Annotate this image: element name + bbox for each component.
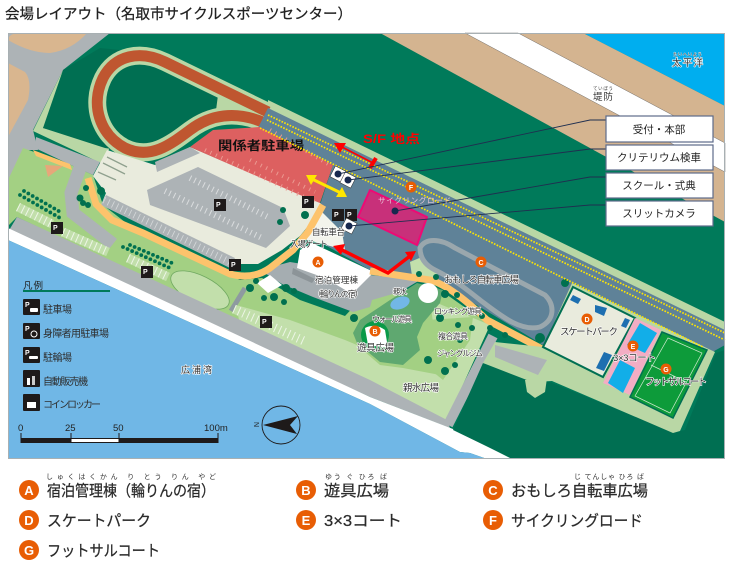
legend C: C <box>488 483 498 498</box>
map labels: 親水広場 <box>403 382 439 394</box>
map frame <box>8 34 724 458</box>
parking stalls in green <box>18 207 304 341</box>
map key <box>23 280 110 411</box>
legend A: しゅくはくかん り とう りん やど <box>46 473 216 481</box>
map orange markers: D <box>584 317 590 324</box>
legend E: E <box>302 513 311 528</box>
key items <box>23 299 109 411</box>
orange patch <box>33 150 72 170</box>
north compass: N <box>252 422 259 427</box>
legend E: 3×3コート <box>324 513 402 530</box>
branch road <box>71 168 113 244</box>
parking icons: P <box>334 212 339 219</box>
map labels: スケートパーク <box>560 327 618 338</box>
orange path <box>88 178 603 381</box>
legend B: 遊具広場 <box>324 482 389 500</box>
oval lawn <box>165 263 235 317</box>
map labels: 親水 <box>393 286 408 296</box>
map labels: ていぼう <box>593 85 613 92</box>
legend D <box>19 510 151 530</box>
callout boxes <box>606 116 713 226</box>
stripes crossing <box>98 157 127 180</box>
legend D: スケートパーク <box>47 512 151 530</box>
map labels: 宿泊管理棟 <box>315 275 358 285</box>
3x3 court <box>603 318 661 395</box>
light lawn <box>236 300 490 424</box>
lower right dark woods <box>453 350 725 459</box>
trees <box>76 185 569 375</box>
legend C <box>483 472 648 500</box>
small lot bottom <box>495 345 547 375</box>
parking icons: P <box>304 199 309 206</box>
key items: P <box>25 326 30 333</box>
tree rows <box>20 191 172 268</box>
map labels: たいへいよう <box>673 52 702 58</box>
key items: P <box>25 350 30 357</box>
north compass <box>252 406 300 444</box>
map labels: 3×3コート <box>613 353 656 364</box>
scale bar: 100m <box>204 423 228 434</box>
dark park base <box>8 148 490 424</box>
cream forecourt <box>93 147 325 264</box>
parking icons <box>51 196 357 328</box>
tan ground <box>8 33 87 137</box>
legend A: 宿泊管理棟（輪りんの宿） <box>47 482 215 500</box>
map orange markers: E <box>631 344 636 351</box>
map labels: 太平洋 <box>672 57 703 69</box>
futsal court <box>630 332 707 418</box>
legend B: B <box>301 483 311 498</box>
coast road <box>8 217 450 428</box>
legend G <box>19 540 160 560</box>
legend C: じ てんしゃ ひろ ば <box>574 472 644 481</box>
parking icons: P <box>347 212 352 219</box>
legend F: サイクリングロード <box>511 512 643 530</box>
map <box>8 33 725 459</box>
staff parking <box>190 127 333 203</box>
key items: コインロッカー <box>43 399 101 411</box>
grey road east of park <box>448 336 493 425</box>
leader dots <box>334 170 398 230</box>
scale bar: 50 <box>113 423 124 434</box>
map labels: おもしろ自転車広場 <box>444 274 519 286</box>
callout boxes: クリテリウム検車 <box>617 151 701 164</box>
upper left roads <box>8 33 110 182</box>
key items: 駐輪場 <box>43 351 72 364</box>
leader lines <box>338 120 606 226</box>
key items: 身障者用駐車場 <box>43 327 109 340</box>
map labels: 自転車台 <box>312 227 345 237</box>
parking icons: P <box>262 319 267 326</box>
beach <box>8 228 512 459</box>
white markers <box>330 166 357 234</box>
scale bar: 25 <box>65 423 76 434</box>
legend A: A <box>24 483 34 498</box>
loop track <box>97 56 268 152</box>
pink scoring area <box>358 190 427 245</box>
main parking lot <box>147 167 290 248</box>
light green verge left <box>33 70 110 165</box>
legend E <box>296 510 402 530</box>
red arrows <box>333 143 416 273</box>
legend G: G <box>24 543 34 558</box>
pond <box>389 294 411 312</box>
key items: P <box>25 302 30 309</box>
white annex <box>257 275 282 293</box>
map labels: 堤防 <box>593 91 613 103</box>
map labels: ジャングルジム <box>437 348 483 358</box>
map labels: 複合遊具 <box>438 331 468 341</box>
embankment <box>380 33 725 222</box>
light patch <box>525 378 547 398</box>
sports area surround <box>483 283 715 433</box>
verge along cycling road <box>268 100 725 332</box>
legend F <box>483 510 643 530</box>
cycling road and plaza <box>258 108 725 355</box>
lower parking strip <box>101 195 235 268</box>
legend C: おもしろ自転車広場 <box>511 482 648 500</box>
ramps <box>570 295 630 371</box>
parking icons: P <box>216 202 221 209</box>
accommodation building <box>297 243 374 294</box>
map labels: （輪りんの宿） <box>313 289 363 299</box>
S/F label: S/F 地点 <box>363 131 420 146</box>
cycling road yellow dotted lines <box>260 115 725 347</box>
map labels: フットサルコート <box>645 377 707 388</box>
scale bar <box>18 423 228 443</box>
play ring <box>361 321 389 349</box>
legend B: ゆう ぐ ひろ ば <box>325 472 387 481</box>
grey access road around lodge <box>260 262 420 312</box>
bicycle stand block <box>300 212 345 250</box>
legend B <box>296 472 389 500</box>
map labels: ウォール遊具 <box>372 314 412 324</box>
map labels: 遊具広場 <box>357 342 394 354</box>
key heading: 凡例 <box>23 280 43 292</box>
omoshiro plaza track <box>420 240 552 328</box>
bottom legend <box>19 472 648 560</box>
green patch near track <box>410 256 440 280</box>
map labels <box>181 52 707 394</box>
Pacific Ocean <box>583 33 725 106</box>
parking icons: P <box>143 269 148 276</box>
parking icons: P <box>53 225 58 232</box>
tan triangle <box>45 165 63 177</box>
map orange markers: F <box>409 185 414 192</box>
title: 会場レイアウト（名取市サイクルスポーツセンター） <box>5 6 352 23</box>
tree belt <box>43 48 130 152</box>
legend D: D <box>24 513 34 528</box>
fountain park <box>353 283 473 380</box>
small grey parking <box>155 147 200 172</box>
legend A <box>19 473 216 500</box>
callout boxes: 受付・本部 <box>633 123 686 136</box>
yellow double arrow <box>306 175 347 197</box>
map orange markers: G <box>663 367 669 374</box>
map orange markers: A <box>315 260 321 267</box>
map orange markers: C <box>478 260 484 267</box>
key items: 駐車場 <box>43 303 72 316</box>
map orange markers: B <box>372 329 378 336</box>
label: staff parking: 関係者駐車場 <box>218 138 305 153</box>
map labels: サイクリングロード <box>378 195 451 205</box>
map labels: ロッキング遊具 <box>434 306 482 316</box>
callout boxes: スクール・式典 <box>622 179 696 192</box>
map labels: 広浦湾 <box>181 364 212 375</box>
parking icons: P <box>231 262 236 269</box>
Hiroura Bay <box>8 240 487 459</box>
map orange markers <box>312 182 672 374</box>
map labels: 入場ゲート <box>290 239 328 249</box>
white dome <box>418 283 438 303</box>
scale bar: 0 <box>18 423 23 434</box>
legend G: フットサルコート <box>47 543 160 560</box>
hatch by lodge <box>292 268 315 283</box>
grey path <box>231 288 245 311</box>
legend F: F <box>489 513 497 528</box>
callout boxes: スリットカメラ <box>622 208 696 220</box>
key items: 自動販売機 <box>43 375 88 388</box>
grey band by forecourt <box>35 137 100 175</box>
